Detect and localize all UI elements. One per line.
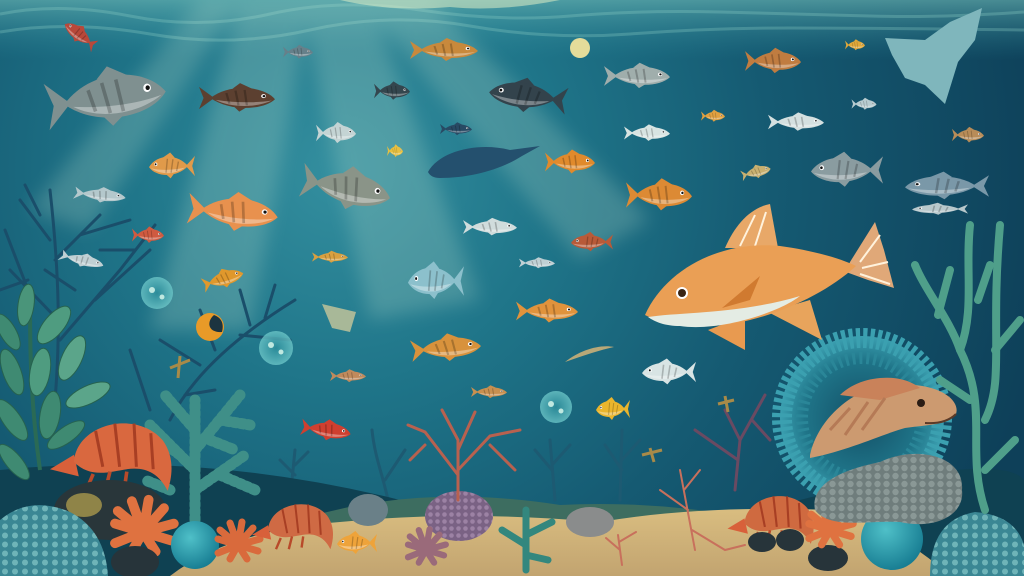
fish: thin tan	[565, 346, 614, 362]
fish: orange yellow	[545, 150, 595, 173]
fish: white	[624, 124, 670, 141]
fish: white centre	[463, 218, 517, 235]
fish: tan low	[471, 385, 507, 398]
red coral centre	[408, 410, 520, 500]
grey rock	[348, 494, 388, 526]
fish: dark	[374, 81, 410, 100]
top fish: large grey	[43, 58, 169, 135]
shrimp centre left	[252, 504, 333, 549]
spiky urchin	[408, 529, 446, 563]
leafy plants left	[0, 283, 114, 484]
blue coral cluster right	[930, 512, 1024, 576]
dark rock left	[54, 480, 166, 540]
fish: white right	[642, 359, 696, 384]
fish: marlin blue grey	[905, 172, 989, 199]
surface glow	[0, 0, 1024, 60]
fish: orange brown	[745, 48, 801, 73]
teal ball 1	[171, 521, 219, 569]
surface waves	[0, 0, 1024, 40]
whale	[428, 146, 540, 178]
big orange fish	[645, 204, 894, 350]
seabed dark	[0, 464, 1024, 576]
plankton bubble 3	[540, 391, 572, 423]
fish: yellow low	[596, 397, 630, 420]
fish: silver thin	[519, 257, 555, 268]
starfish tiny	[170, 356, 734, 462]
plankton bubble 2	[259, 331, 293, 365]
ray: pale blue creature	[885, 8, 982, 104]
fish: white small	[852, 98, 876, 110]
blue coral cluster left	[0, 505, 108, 576]
fish: silver left	[73, 185, 127, 205]
orange anemone right	[809, 506, 853, 545]
seabed green ridge	[270, 497, 760, 540]
purple sea sponge	[425, 491, 493, 541]
fish: silver small	[57, 248, 107, 271]
fish: orange small centre	[312, 251, 348, 263]
kite creature	[322, 304, 356, 332]
fish: yellow tiny	[387, 144, 403, 157]
teal bushy coral	[145, 395, 255, 520]
green seaweed on sand	[502, 510, 552, 570]
fish: orange tan	[410, 38, 478, 61]
eel creature	[810, 378, 957, 458]
fish: white striped	[316, 122, 356, 143]
fish: dark brown	[199, 83, 275, 112]
fish: grey small	[283, 45, 313, 59]
dim background coral	[280, 430, 640, 510]
shrimp right	[728, 496, 814, 544]
green kelp right	[915, 225, 1020, 510]
fish: clown orange	[149, 153, 195, 178]
teal ball right	[861, 508, 923, 570]
sand floor	[170, 509, 950, 576]
orange anemone 1	[115, 500, 174, 552]
fish: grey	[811, 152, 883, 187]
fish: silver	[604, 63, 670, 88]
fish: orange centre 2	[409, 331, 482, 364]
light rays	[30, 0, 650, 330]
fish: small red	[61, 16, 100, 54]
fish: yellow	[845, 39, 865, 50]
fish: orange striped	[626, 178, 692, 210]
fish: orange small	[701, 110, 725, 122]
fish: silver long	[912, 203, 968, 215]
grey rock 2	[566, 507, 614, 537]
tan coral fan	[66, 493, 102, 517]
fish: dark shark	[487, 73, 569, 118]
fish: orange grey	[952, 127, 984, 142]
small orange fish on sand	[337, 531, 377, 554]
fish: pale blue round	[408, 261, 464, 299]
fish: orange large left	[186, 188, 280, 234]
fish: red orange	[571, 232, 613, 251]
fish: pale yellow round	[570, 38, 590, 58]
fish: tan small low	[330, 369, 366, 382]
fish: orange centre	[516, 299, 578, 322]
fish: orange diagonal	[200, 263, 246, 294]
fish: red low	[300, 416, 352, 443]
fish: red small	[132, 226, 164, 243]
dark branching seaweed left	[0, 185, 295, 420]
pink coral on sand	[606, 470, 745, 565]
plankton bubble 1	[141, 277, 173, 309]
fish: striped large	[298, 157, 394, 217]
dark rock 2	[111, 546, 159, 576]
fish: white 2	[768, 112, 824, 131]
teal coral disc	[780, 336, 944, 500]
shrimp left	[50, 423, 172, 491]
fish: dark blue	[440, 122, 472, 135]
fish: tan small	[740, 161, 772, 182]
dim red coral mid right	[695, 395, 770, 490]
dark rocks right	[748, 529, 848, 571]
large grey rock	[814, 454, 962, 524]
orange anemone 2	[218, 522, 260, 559]
fish: yellow moon	[196, 313, 224, 341]
